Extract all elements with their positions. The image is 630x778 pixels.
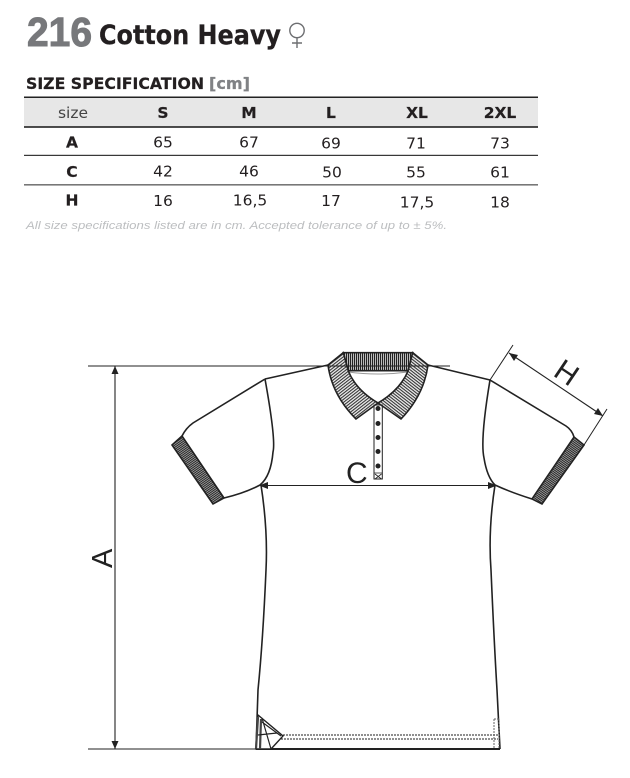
model number: 216 <box>27 9 92 55</box>
table header row: M <box>241 104 257 122</box>
table header row: S <box>157 104 169 122</box>
size table <box>24 96 538 212</box>
dimension C <box>259 457 497 490</box>
table row A: A <box>66 134 78 152</box>
label H: H <box>548 353 585 393</box>
table header row: 2XL <box>484 104 516 122</box>
table row H: 16 <box>153 192 173 210</box>
table row C: 50 <box>322 164 342 182</box>
table row H: 17 <box>321 192 341 210</box>
heading: size specification: [cm] <box>209 74 250 93</box>
table row A: 71 <box>406 134 426 152</box>
title <box>27 9 304 55</box>
side vent with label <box>256 715 283 749</box>
icon: female symbol <box>290 23 304 48</box>
table row H: 16,5 <box>233 192 267 210</box>
hem stitching <box>281 719 499 749</box>
button placket <box>374 405 382 479</box>
tolerance note: All size specifications listed are in cm. Accepted tolerance of up to ± 5%. <box>25 220 447 232</box>
table row C <box>66 162 510 182</box>
product name: Cotton Heavy <box>99 20 281 51</box>
table header row: L <box>326 104 336 122</box>
table row A: 65 <box>153 134 173 152</box>
dimension H <box>490 345 607 445</box>
label A: A <box>87 548 119 568</box>
table row C: C <box>66 163 78 181</box>
collar <box>328 353 428 419</box>
table row A: 73 <box>490 134 510 152</box>
table row C: 42 <box>153 162 173 180</box>
table row C: 55 <box>406 164 426 182</box>
table row A: 69 <box>321 134 341 152</box>
table row A: 67 <box>239 134 259 152</box>
right sleeve cuff <box>532 437 584 504</box>
table header row <box>58 104 516 122</box>
table header row: size <box>58 104 88 122</box>
table row C: 46 <box>239 162 259 180</box>
table row H: 17,5 <box>400 194 434 212</box>
table row C: 61 <box>490 164 510 182</box>
garment diagram: polo shirt <box>172 353 584 749</box>
table row H: H <box>66 192 78 210</box>
left sleeve cuff <box>172 436 224 504</box>
shirt outline <box>182 365 574 749</box>
table row H: 18 <box>490 194 510 212</box>
label C: C <box>346 457 368 490</box>
dimension A <box>87 366 450 749</box>
heading: size specification: SIZE SPECIFICATION <box>26 74 204 93</box>
table header row: XL <box>406 104 428 122</box>
table row H <box>66 192 510 212</box>
table row A <box>66 134 510 152</box>
